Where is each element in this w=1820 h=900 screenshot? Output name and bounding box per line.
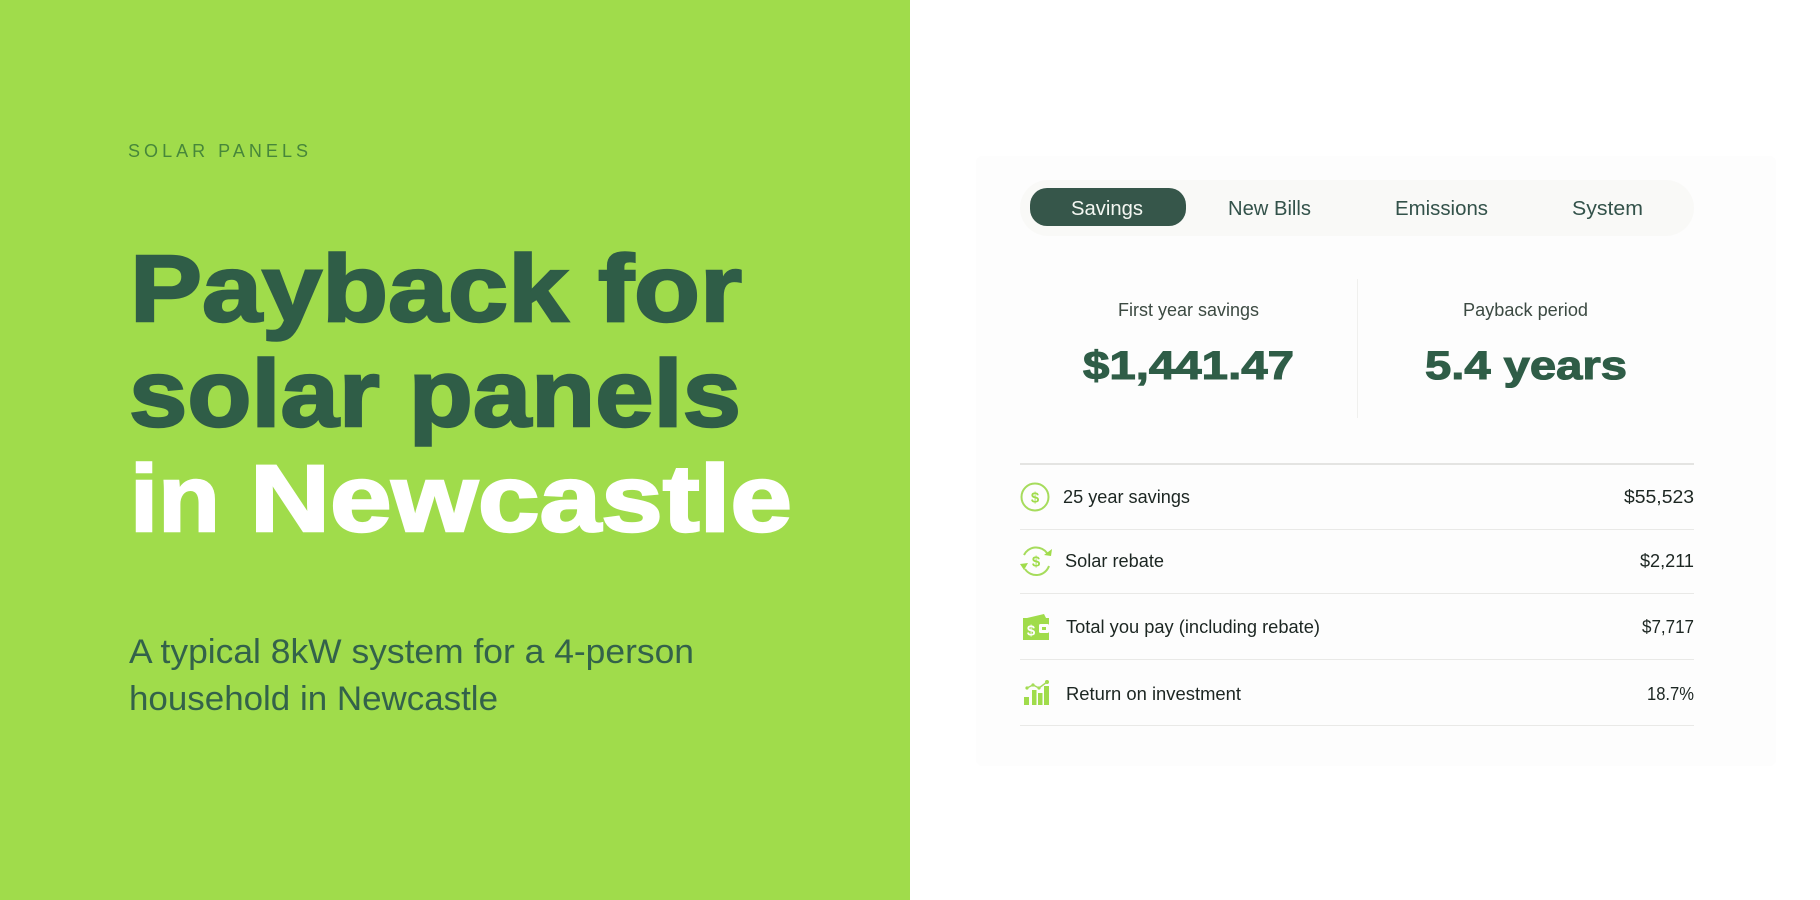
tab: System: System [1572,198,1643,220]
icon: rebate arrows [1020,547,1052,575]
subtitle: A typical 8kW system for a 4-person [129,633,694,671]
title: in [130,446,220,552]
row: solar rebate [1020,547,1694,575]
row: total you pay [1023,614,1694,640]
subtitle [129,633,694,718]
icon: rebate arrows: $ [1032,554,1041,570]
subtitle: household in Newcastle [129,680,498,718]
left green panel [0,0,910,900]
tab bar [1020,180,1694,236]
tab: Emissions: Emissions [1395,198,1488,220]
icon: dollar coin: $ [1031,490,1040,506]
stat: payback period: 5.4 years [1425,344,1627,388]
row: 25 year savings: 25 year savings [1063,486,1190,507]
icon: growth chart [1024,680,1049,705]
title: Payback for [130,236,742,342]
stat: payback period [1425,300,1627,388]
savings card [976,156,1776,766]
stat: first year savings: First year savings [1118,300,1259,320]
stat: payback period: Payback period [1463,300,1588,320]
icon: dollar coin [1022,484,1048,510]
row: return on investment [1024,680,1694,705]
title [129,236,792,552]
active tab: Savings [1030,188,1186,226]
row: return on investment: 18.7% [1647,683,1694,704]
icon: wallet: $ [1027,622,1036,640]
active tab: Savings: Savings [1071,198,1143,220]
row: 25 year savings: $55,523 [1624,486,1694,507]
row: solar rebate: Solar rebate [1065,550,1164,571]
title: Newcastle [250,446,792,552]
icon: wallet [1023,614,1049,640]
stat: first year savings [1083,300,1294,388]
row: return on investment: Return on investment [1066,683,1241,704]
stat: first year savings: $1,441.47 [1083,344,1294,388]
eyebrow label: SOLAR PANELS [128,141,308,161]
row: total you pay: $7,717 [1642,616,1694,637]
title: solar panels [129,341,741,447]
row: solar rebate: $2,211 [1640,550,1694,571]
tab: New Bills: New Bills [1228,198,1311,220]
row: 25 year savings [1022,484,1694,510]
row: total you pay: Total you pay (including rebate) [1066,616,1320,637]
